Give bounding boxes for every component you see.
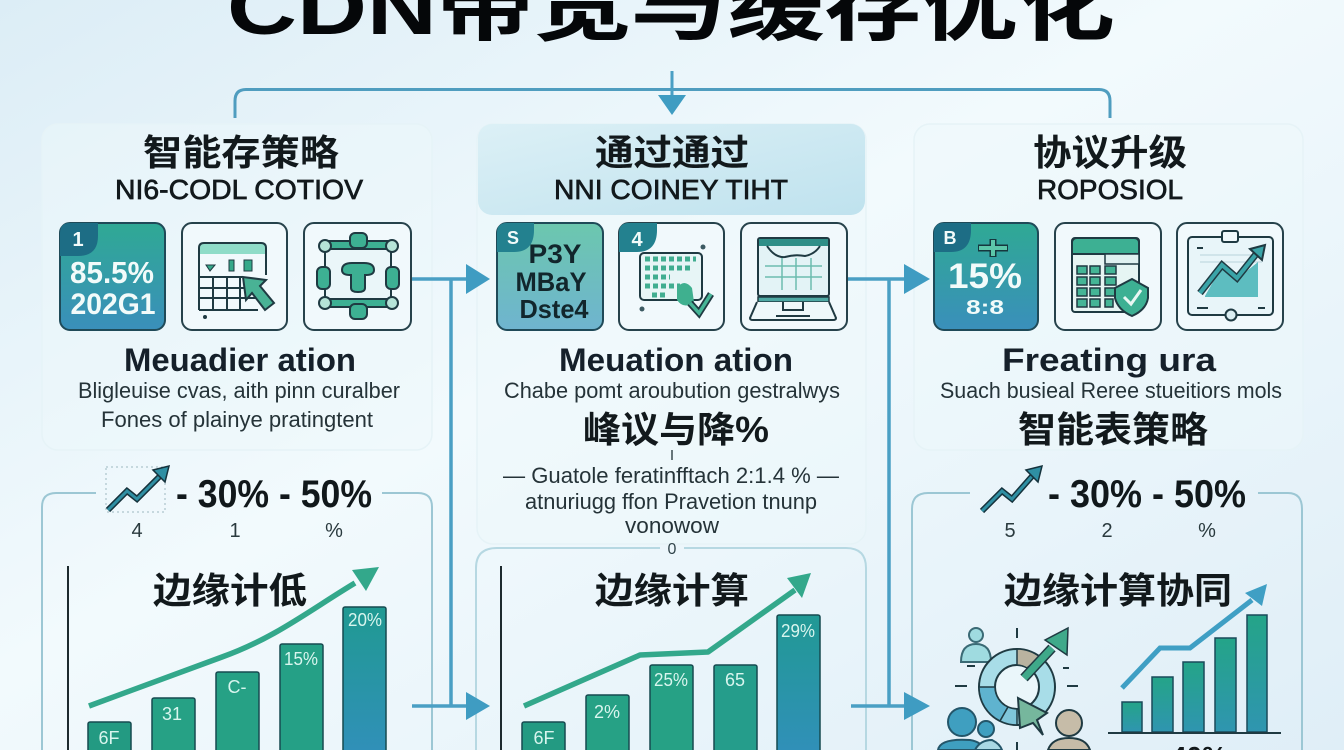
bar labels (98, 610, 382, 748)
icon: frame T shape (304, 223, 411, 330)
bar labels: C- (228, 677, 246, 697)
flow arrow: left to centre (412, 264, 490, 720)
metric: percentages: - 30% - 50% (176, 473, 372, 516)
text: centre detail (503, 450, 839, 538)
tile: stat 1: 202G1 (70, 288, 156, 321)
bar chart: right (1108, 615, 1281, 733)
icon: spreadsheet with check (1055, 223, 1161, 330)
panel: centre chart (476, 541, 866, 750)
subheading: left: NI6-CODL COTIOV (115, 174, 363, 205)
metric labels (1004, 520, 1216, 542)
tile: stat 15 percent: 15% (948, 257, 1022, 296)
panel: right metrics chart (912, 466, 1302, 750)
chart axis (500, 566, 502, 750)
icon: laptop chart (741, 223, 847, 330)
bar labels: 6F (98, 728, 120, 748)
text: right description: Suach busieal Reree stueitiors mols (940, 378, 1282, 403)
top connector bracket (235, 71, 1110, 118)
trend arrow: right chart (1122, 584, 1267, 688)
trend arrow: centre chart (524, 573, 811, 706)
tile: stat 3: P3Y (528, 239, 582, 269)
chart title: 边缘计算协同 (1004, 570, 1232, 611)
text: centre detail: atnuriugg ffon Pravetion tnunp (525, 489, 817, 514)
text: left description: Fones of plainye pratingtent (101, 407, 373, 432)
icon: report with growth chart (1177, 223, 1283, 330)
flow arrow: centre to right (848, 264, 930, 720)
tile: stat 15 percent (934, 223, 1038, 330)
text: left description (78, 378, 400, 432)
bar chart: left (88, 607, 386, 750)
metric labels (131, 520, 343, 542)
text: centre detail: vonowow (625, 513, 719, 538)
tile: stat 15 percent: B (944, 228, 956, 248)
bar labels: 20% (348, 610, 382, 630)
heading band (478, 124, 865, 215)
tile: stat 3: S (507, 228, 519, 248)
text: centre description: Chabe pomt aroubution gestralwys (504, 378, 840, 403)
trend arrow: left chart (89, 567, 379, 706)
metric labels: 4 (131, 520, 143, 542)
metric labels: % (1198, 520, 1216, 542)
panel: right strategy (914, 124, 1303, 450)
text: centre title: Meuation ation (559, 342, 793, 378)
bar labels: 2% (594, 702, 620, 722)
tile: stat 1: 85.5% (70, 255, 154, 290)
marker: 0 (668, 541, 677, 558)
bar labels: 29% (781, 621, 815, 641)
text: centre CJK heading: 峰议与降% (583, 409, 769, 450)
icon: checked grid: 4 (631, 229, 643, 251)
metric labels: % (325, 520, 343, 542)
bar labels (533, 621, 815, 748)
tile: stat 3: Dste4 (520, 294, 589, 324)
metric labels: 2 (1101, 520, 1113, 542)
chart axis (67, 566, 69, 750)
tile: stat 1 (60, 223, 165, 330)
icon: people and cycle (938, 628, 1090, 750)
tile: stat 3 (497, 223, 603, 330)
subheading: centre: NNI COINEY TIHT (554, 174, 788, 205)
heading: left: 智能存策略 (143, 132, 339, 173)
panel: left strategy (42, 124, 432, 450)
icon: checked grid (619, 223, 724, 330)
text: right title: Freating ura (1002, 342, 1216, 378)
chart title: 边缘计低 (153, 570, 307, 611)
heading: centre: 通过通过 (595, 132, 749, 173)
text: centre detail: — Guatole feratinfftach 2:1.4 % — (503, 463, 839, 488)
metric labels: 5 (1004, 520, 1016, 542)
bar chart: centre (522, 615, 820, 750)
subheading: right: ROPOSIOL (1037, 174, 1183, 205)
bar labels: 25% (654, 670, 688, 690)
metric: percentages: - 30% - 50% (1048, 473, 1246, 516)
bar labels: 31 (162, 704, 182, 724)
bar labels: 15% (284, 649, 318, 669)
text: left title: Meuadier ation (124, 342, 356, 378)
text: right CJK heading: 智能表策略 (1018, 409, 1208, 450)
tile: stat 15 percent: 8:8 (966, 297, 1004, 319)
heading: right: 协议升级 (1033, 132, 1187, 173)
bar labels: 6F (533, 728, 555, 748)
icon: trend arrow (982, 466, 1042, 511)
panel: left metrics chart (42, 466, 432, 750)
bar labels: 65 (725, 670, 745, 690)
tile: stat 3: MBaY (516, 267, 586, 297)
chart title: 边缘计算 (595, 570, 749, 611)
panel: centre strategy (477, 124, 866, 544)
metric labels: 1 (229, 520, 241, 542)
text: left description: Bligleuise cvas, aith pinn curalber (78, 378, 400, 403)
icon: calendar table with cursor (182, 223, 287, 330)
icon: trend arrow (106, 466, 169, 512)
tile: stat 1: 1 (72, 229, 84, 251)
